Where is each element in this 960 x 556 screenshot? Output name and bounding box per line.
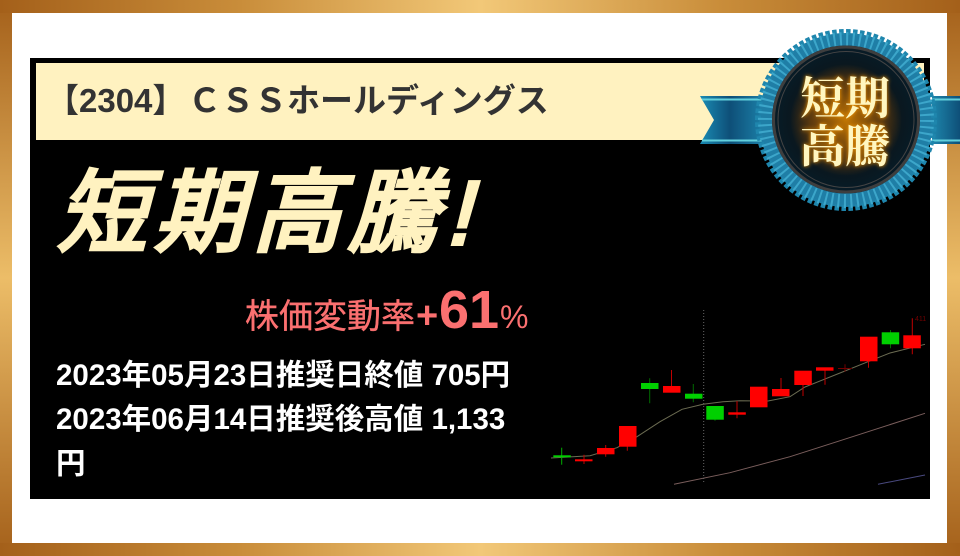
- wicks: [562, 318, 912, 465]
- high price tag: 411: [915, 316, 926, 323]
- badge glow text: 短期: [800, 74, 890, 124]
- price change rate: [245, 280, 528, 340]
- recommendation details: [56, 359, 510, 480]
- medallion badge: [758, 32, 934, 208]
- price change rate: %: [500, 299, 528, 335]
- badge text: 短期: [800, 74, 890, 124]
- moving average lines: [551, 344, 925, 484]
- black panel: [30, 58, 930, 499]
- badge text: [800, 74, 890, 172]
- price change rate: +: [416, 295, 438, 337]
- candlestick chart: [551, 310, 926, 484]
- recommendation details: 2023年06月14日推奨後高値 1,133: [56, 403, 505, 436]
- stock title: ＣＳＳホールディングス: [188, 82, 549, 119]
- price change rate: 61: [439, 280, 499, 340]
- badge glow text: 高騰: [800, 122, 890, 172]
- red candles: [575, 335, 921, 461]
- headline: 短期高騰!: [52, 163, 499, 264]
- recommendation details: 2023年05月23日推奨日終値 705円: [56, 359, 510, 392]
- price change rate: 株価変動率: [245, 298, 415, 336]
- crosshair line: [703, 310, 705, 484]
- badge text: 高騰: [800, 122, 890, 172]
- stock title: 【2304】: [46, 82, 185, 119]
- green candles: [553, 332, 899, 457]
- ribbon: [700, 96, 960, 144]
- recommendation details: 円: [56, 448, 86, 480]
- badge glow text: [800, 74, 890, 172]
- title bar: [36, 63, 924, 140]
